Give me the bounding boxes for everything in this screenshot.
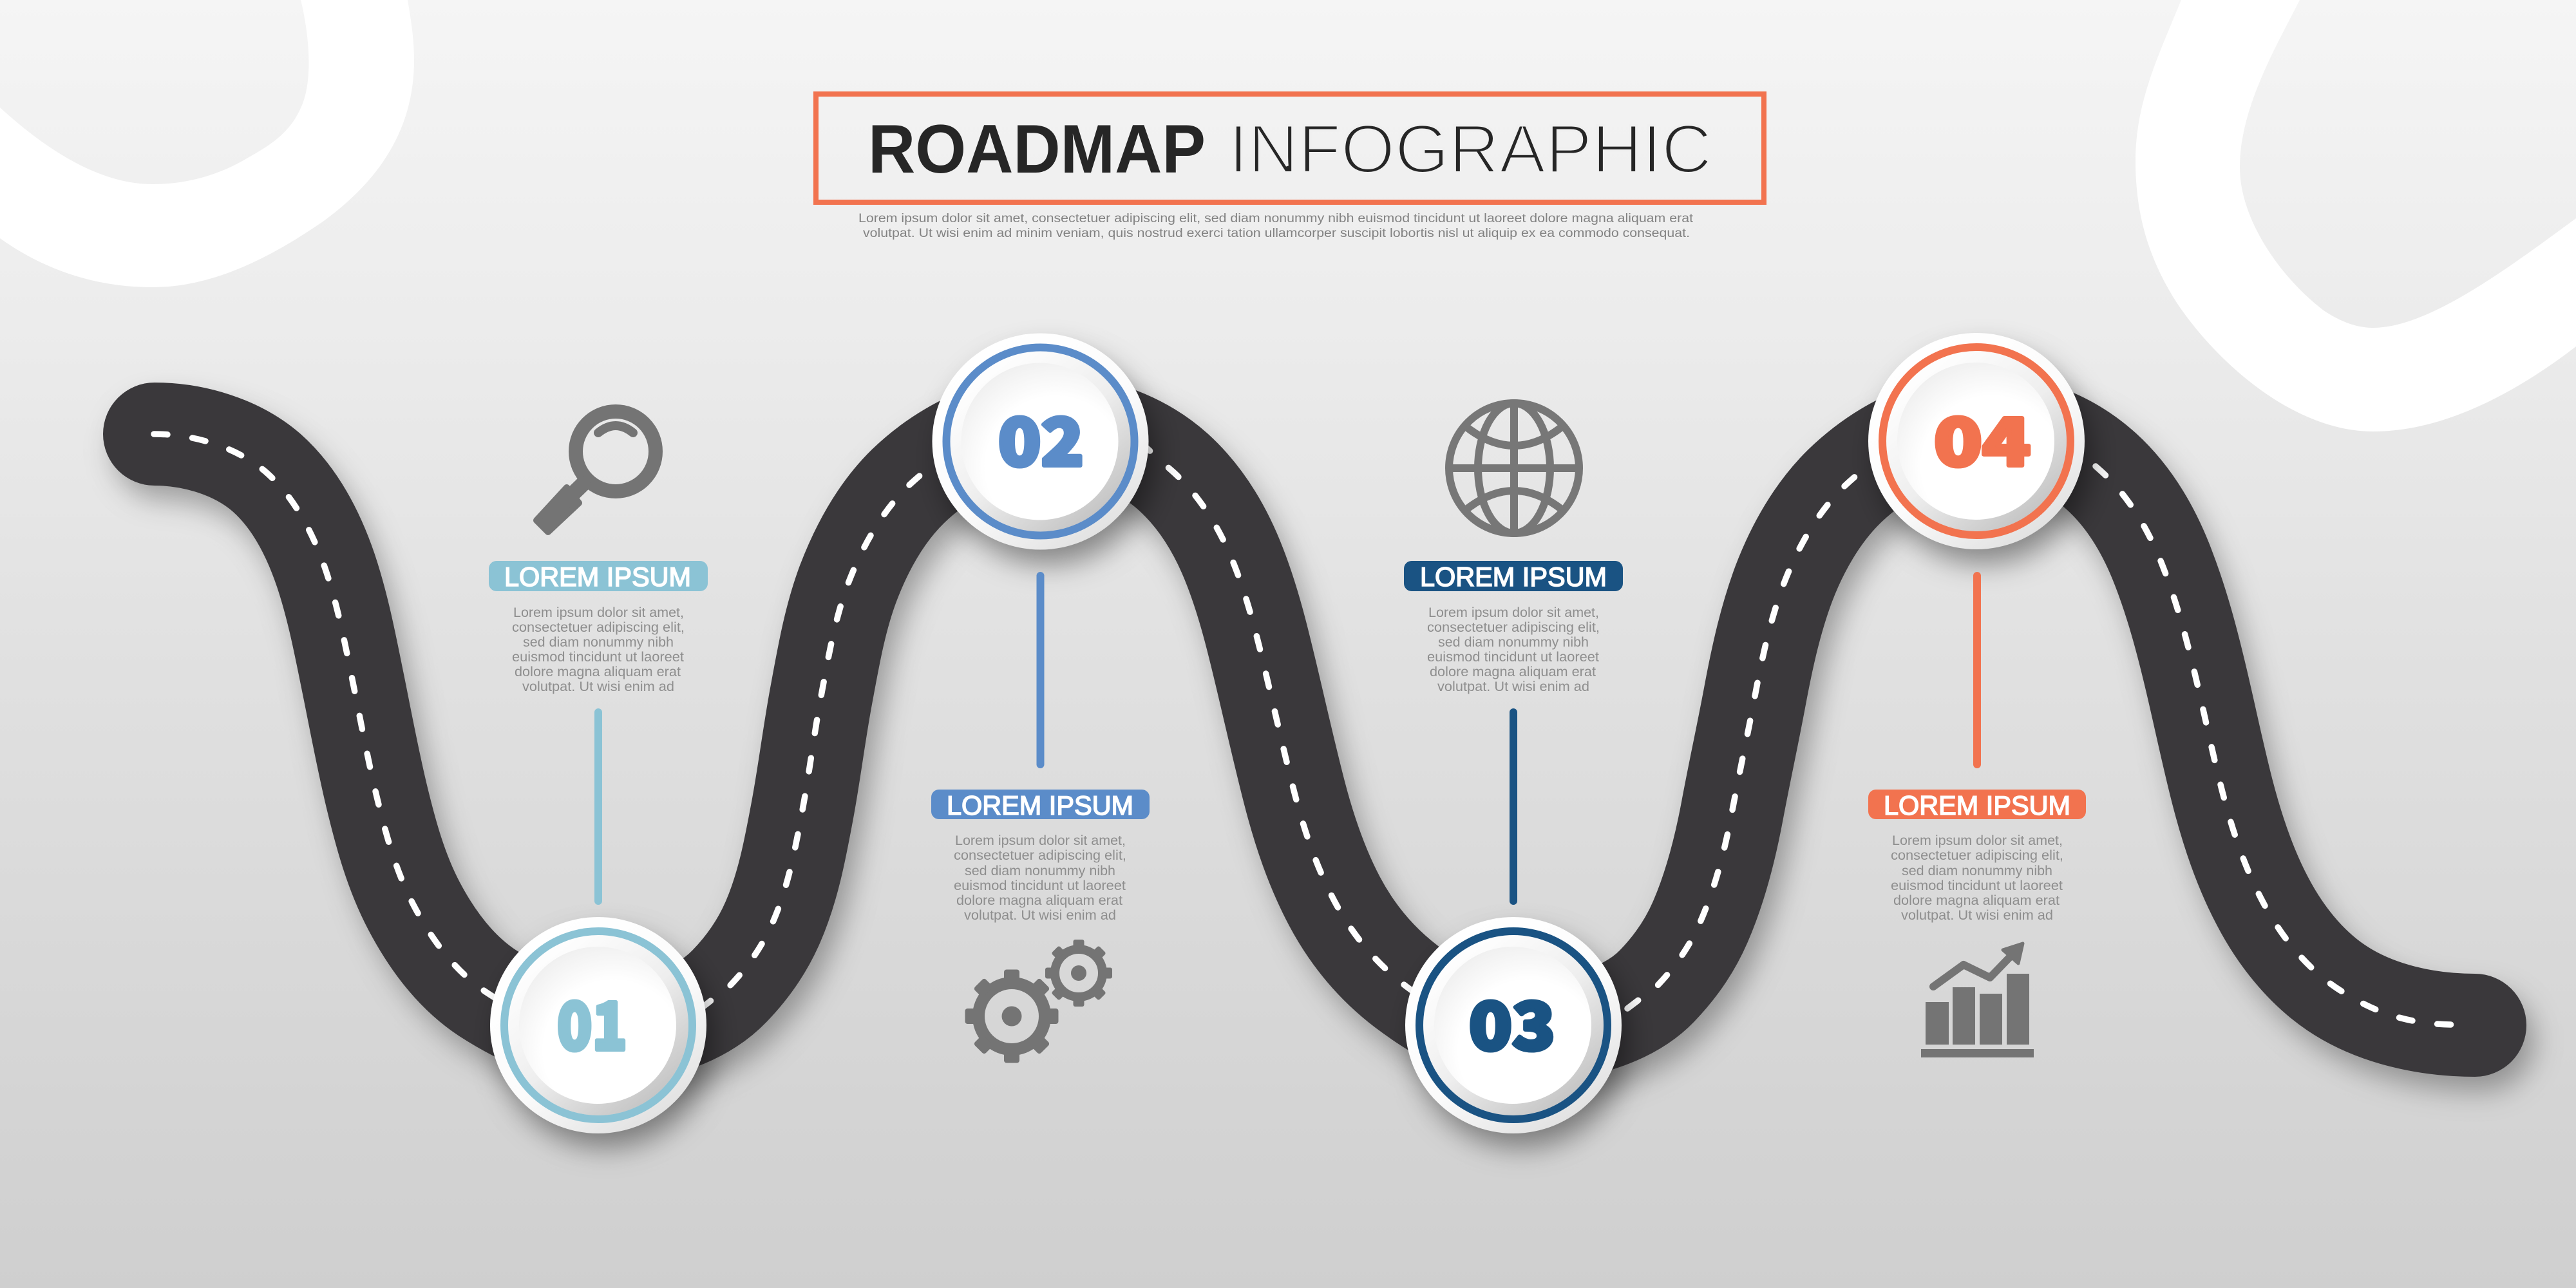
description text 04: Lorem ipsum dolor sit amet,: [1892, 833, 2063, 848]
marker 03: [1405, 917, 1628, 1148]
connector line 03: [1510, 708, 1517, 905]
road surface: [155, 425, 2475, 1032]
title: infographic: INFOGRAPHIC: [1229, 110, 1712, 187]
marker 02: 02: [998, 390, 1084, 485]
subtitle: Lorem ipsum dolor sit amet, consectetuer adipiscing elit, sed diam nonummy nibh euismod tincidunt ut laoreet dolore magna aliquam erat: [858, 211, 1694, 225]
connector line 02: [1037, 572, 1045, 768]
road shadow: [164, 440, 2484, 1048]
panel: step 02: [931, 334, 1155, 1063]
decorative white curve: top left: [0, 0, 414, 287]
description text 01: volutpat. Ut wisi enim ad: [522, 679, 674, 694]
marker 04: [1868, 333, 2091, 564]
description text 04: dolore magna aliquam erat: [1893, 893, 2060, 908]
connector line 04: [1973, 572, 1981, 768]
description text 01: dolore magna aliquam erat: [515, 665, 681, 679]
description text 04: euismod tincidunt ut laoreet: [1891, 878, 2063, 893]
title block: [816, 94, 1764, 240]
title frame: [816, 94, 1764, 202]
description text 02: consectetuer adipiscing elit,: [954, 848, 1126, 863]
marker 02: [933, 334, 1155, 564]
description text 02: euismod tincidunt ut laoreet: [954, 878, 1126, 893]
marker 04: 04: [1934, 390, 2031, 485]
description text 04: consectetuer adipiscing elit,: [1891, 848, 2063, 863]
label badge 04: LOREM IPSUM: [1884, 790, 2070, 820]
description text 03: Lorem ipsum dolor sit amet,: [1428, 605, 1599, 620]
description text 04: volutpat. Ut wisi enim ad: [1901, 908, 2053, 923]
description text 04: sed diam nonummy nibh: [1902, 864, 2052, 878]
description text 02: Lorem ipsum dolor sit amet,: [955, 833, 1126, 848]
panel: step 03: [1404, 403, 1628, 1148]
marker 01: 01: [557, 974, 627, 1069]
description text 04: [1891, 833, 2063, 923]
description text 02: volutpat. Ut wisi enim ad: [964, 908, 1116, 923]
subtitle: volutpat. Ut wisi enim ad minim veniam, quis nostrud exerci tation ullamcorper suscipit lobortis nisl ut aliquip ex ea commodo consequat.: [863, 226, 1690, 240]
icon: gears: [965, 940, 1112, 1063]
description text 01: Lorem ipsum dolor sit amet,: [513, 605, 684, 620]
icon: growth chart: [1921, 943, 2034, 1057]
label badge 03: LOREM IPSUM: [1420, 562, 1607, 592]
panel: step 01: [489, 412, 713, 1148]
description text 03: volutpat. Ut wisi enim ad: [1437, 679, 1589, 694]
road centre dashes: [154, 434, 2455, 1025]
label badge 02: LOREM IPSUM: [947, 790, 1133, 820]
description text 02: dolore magna aliquam erat: [956, 893, 1122, 908]
title: roadmap: ROADMAP: [868, 110, 1206, 187]
description text 01: euismod tincidunt ut laoreet: [512, 650, 684, 665]
description text 03: consectetuer adipiscing elit,: [1427, 620, 1600, 635]
panel: step 04: [1868, 333, 2091, 1057]
description text 03: [1427, 605, 1600, 694]
winding road: [154, 425, 2484, 1048]
description text 02: sed diam nonummy nibh: [965, 864, 1115, 878]
icon: globe: [1449, 403, 1579, 533]
decorative white curve: top right: [2136, 0, 2576, 431]
marker 01: [490, 917, 713, 1148]
description text 03: sed diam nonummy nibh: [1438, 635, 1589, 650]
description text 01: sed diam nonummy nibh: [523, 635, 674, 650]
label badge 01: LOREM IPSUM: [504, 562, 691, 592]
connector line 01: [594, 708, 602, 905]
description text 01: [512, 605, 685, 694]
icon: magnifying glass: [536, 412, 656, 532]
description text 03: euismod tincidunt ut laoreet: [1427, 650, 1599, 665]
description text 02: [954, 833, 1126, 923]
description text 01: consectetuer adipiscing elit,: [512, 620, 685, 635]
subtitle: [858, 211, 1694, 240]
description text 03: dolore magna aliquam erat: [1430, 665, 1596, 679]
marker 03: 03: [1469, 974, 1555, 1069]
